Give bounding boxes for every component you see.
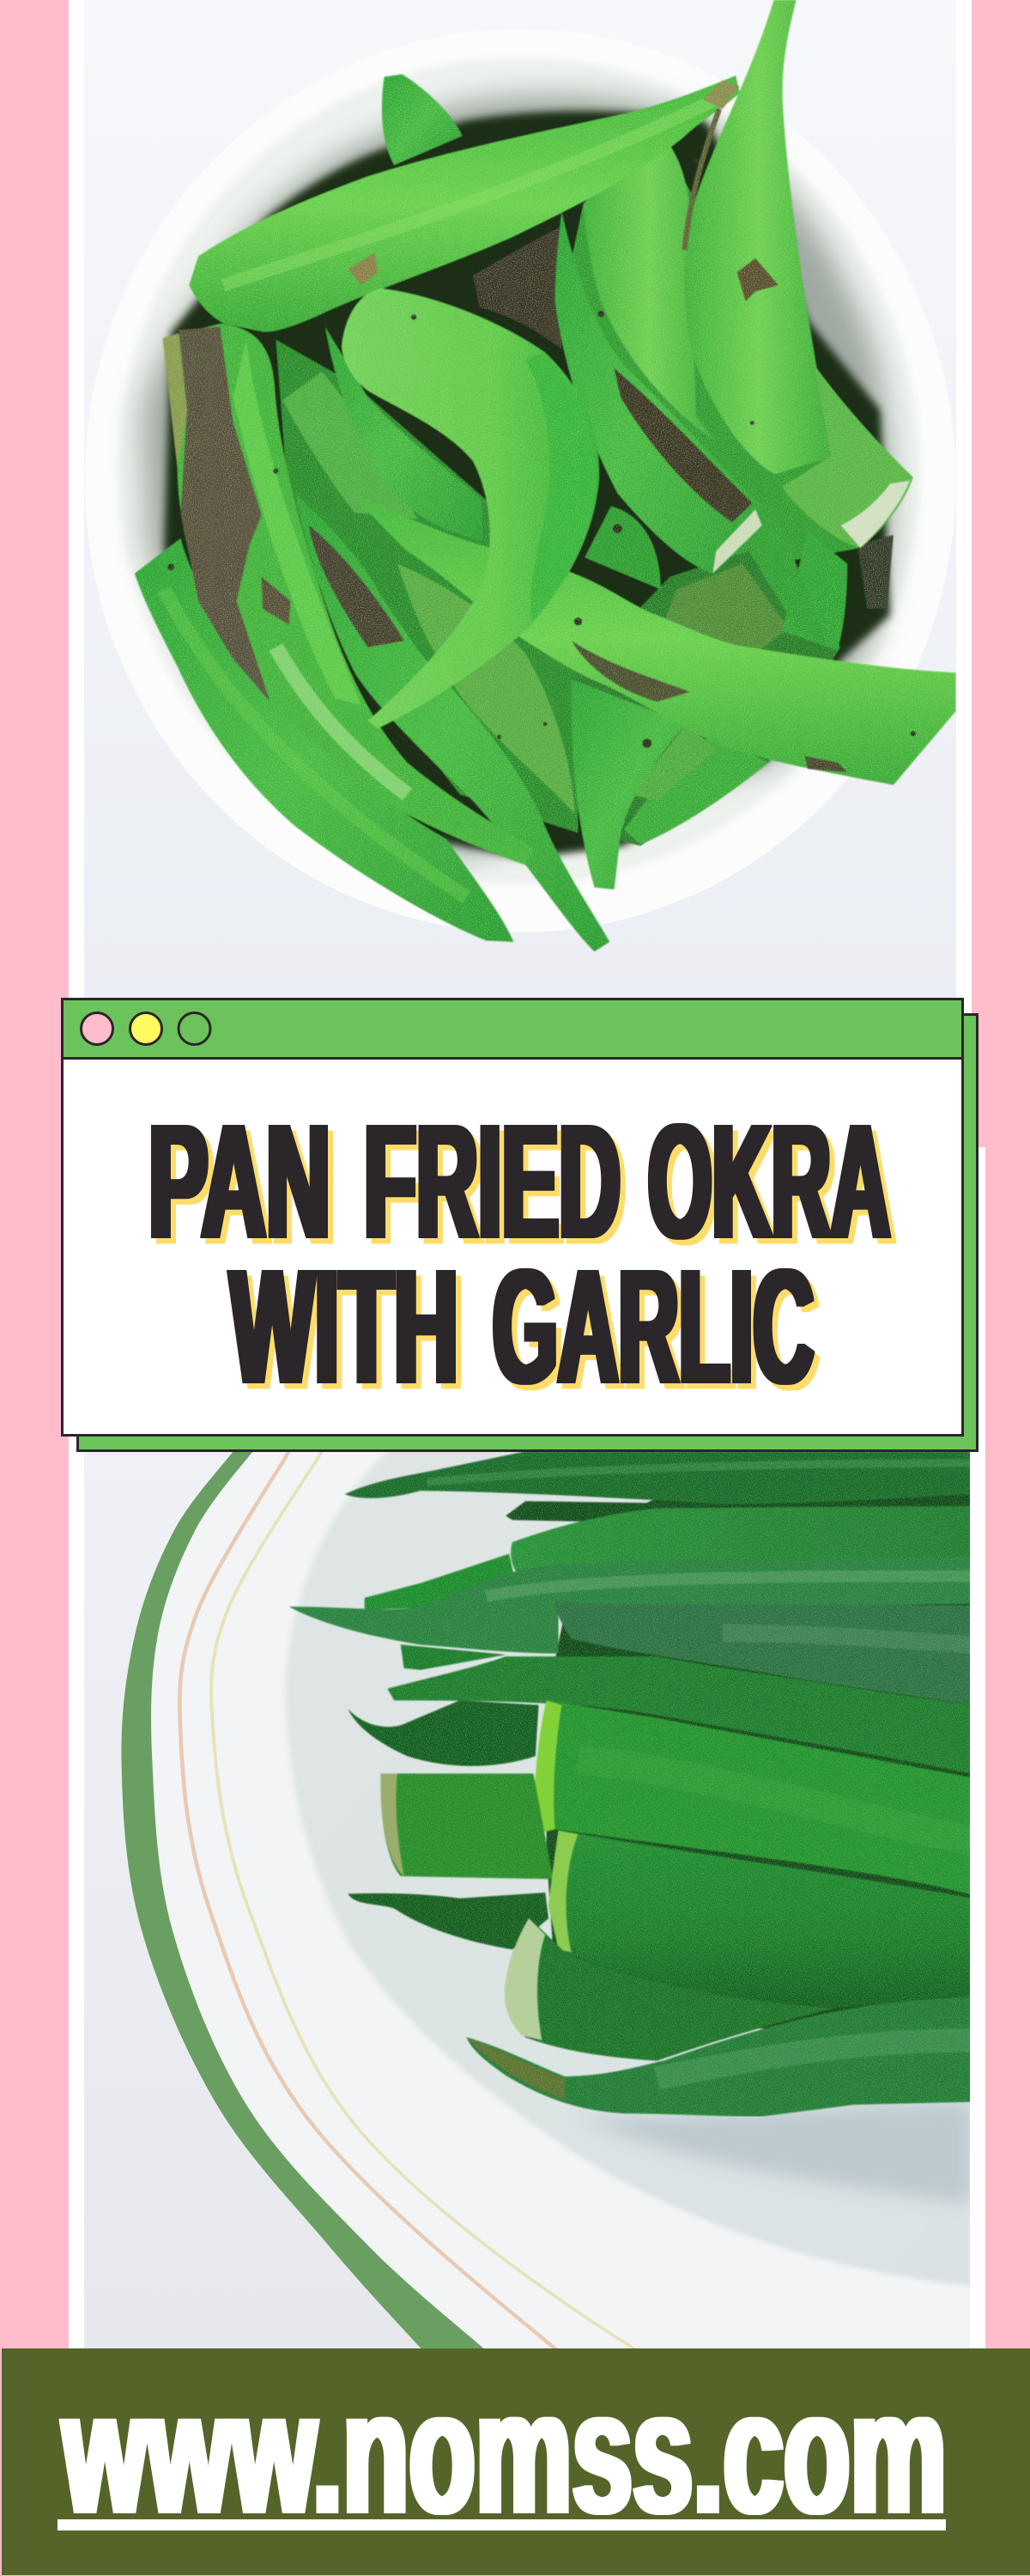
okra: far left (135, 538, 513, 942)
table background (84, 0, 956, 1005)
back pods (345, 1451, 972, 1766)
okra: curved front piece (342, 289, 599, 728)
okra: lower back pieces (295, 494, 687, 951)
title text: FRIED (369, 1099, 626, 1278)
bowl (85, 29, 956, 933)
photo: okra in white bowl (84, 0, 956, 998)
window title bar (64, 1000, 961, 1060)
white frame: upper (69, 0, 972, 1147)
okra (135, 0, 956, 951)
okra: pepper specks (167, 158, 916, 748)
cut pods (348, 1700, 972, 2061)
title window (61, 998, 964, 1437)
front spear pods (289, 1557, 972, 1774)
plate (121, 1443, 972, 2362)
footer band (2, 2348, 1030, 2575)
table background (84, 1443, 970, 2353)
okra: top long piece (189, 76, 740, 332)
okra: left burnt piece (163, 324, 533, 865)
title text (148, 1099, 896, 1408)
okra bundle (289, 1451, 972, 2117)
dark backing (519, 1490, 972, 2028)
back panel: green window shadow (76, 1013, 978, 1452)
okra: central piece with burnt strip (555, 211, 763, 574)
bottom pod (466, 1996, 972, 2117)
okra: back pieces (282, 75, 894, 844)
backing greens (275, 182, 858, 847)
white frame: lower (69, 1147, 985, 2435)
title text: PAN (154, 1099, 336, 1278)
okra: tall right piece (684, 0, 913, 548)
okra: big horizontal piece (354, 494, 956, 785)
photo: okra on green-rimmed plate (84, 1452, 970, 2348)
